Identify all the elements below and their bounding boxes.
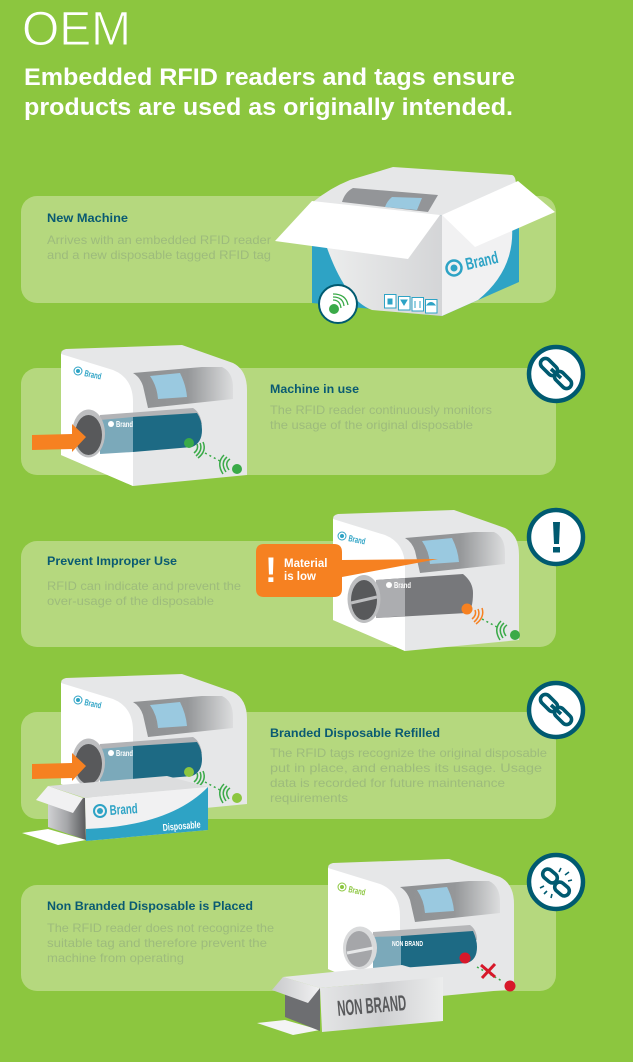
text: prevent improper use [47,579,241,608]
cylinder [72,737,202,786]
text: branded disposable refilled: data is recorded for future maintenance [270,776,505,790]
callout: material is low [256,544,438,597]
heading: machine in use: Machine in use [270,382,359,396]
handling symbols [384,294,437,313]
text: branded disposable refilled: put in place, and enables its usage. Usage [270,761,542,775]
failed rfid link [460,952,516,992]
text: machine in use: The RFID reader continuously monitors [270,403,492,417]
brand logo: Brand [84,697,102,710]
icon: rfid tag badge [319,285,357,323]
subtitle: Embedded RFID readers and tags ensure [24,64,515,91]
brand logo [338,883,366,897]
text: prevent improper use: RFID can indicate and prevent the [47,579,241,593]
panel: machine in use [21,368,556,475]
rfid signal [184,767,242,803]
panel: new machine [21,196,556,303]
cylinder [348,574,473,623]
brand logo [74,367,102,381]
cylinder: Brand [116,749,133,758]
arrow [32,424,86,452]
subtitle: products are used as originally intended. [24,94,513,121]
rfid signal [462,604,520,640]
brand logo: box: Brand [464,248,500,274]
brand logo: box [446,248,500,276]
brand logo: Brand [348,884,366,897]
illustration: machine with branded disposable [22,674,247,845]
icon: linked chain 2 [529,683,583,737]
text: non branded disposable [47,921,274,965]
title: OEM [22,3,131,56]
brand logo: Brand [348,533,366,546]
text: machine in use: the usage of the original disposable [270,418,473,432]
text: branded disposable refilled [270,746,547,805]
illustration: machine in open box [275,167,555,323]
heading: branded disposable refilled: Branded Disposable Refilled [270,726,440,740]
text: prevent improper use: over-usage of the disposable [47,594,214,608]
callout: material is low: is low [284,571,316,583]
cylinder: Brand [116,420,133,429]
text: branded disposable refilled: requirements [270,791,348,805]
illustration: machine in use [32,345,247,486]
brand logo [338,532,366,546]
illustration: machine with non brand disposable [257,859,516,1035]
cylinder [343,925,477,970]
callout: material is low: Material [284,558,327,570]
cylinder [72,408,202,458]
callout: material is low: ! [265,551,277,590]
disposable box: Disposable [162,820,201,834]
rfid signal [184,438,242,474]
text: branded disposable refilled: The RFID tags recognize the original disposable [270,746,547,760]
text: non branded disposable: The RFID reader does not recognize the [47,921,274,935]
cylinder: NON BRAND [392,941,423,948]
text: new machine: Arrives with an embedded RFID reader [47,233,271,247]
arrow [32,753,86,781]
disposable box: Brand [109,800,138,818]
panel: non branded disposable [21,885,556,991]
heading: prevent improper use: Prevent Improper Use [47,554,177,568]
non brand box [257,965,443,1035]
cylinder: Brand [394,581,411,590]
non brand box: NON BRAND [336,990,407,1021]
icon: linked chain 1 [529,347,583,401]
text: new machine: and a new disposable tagged RFID tag [47,248,271,262]
panel: branded disposable refilled [21,712,556,819]
heading: non branded disposable: Non Branded Disposable is Placed [47,899,253,913]
heading: new machine: New Machine [47,211,128,225]
subtitle [24,64,515,121]
disposable box [22,776,208,845]
text: non branded disposable: suitable tag and therefore prevent the [47,936,267,950]
icon: alert [529,510,583,564]
text: machine in use [270,403,492,432]
icon: broken chain [529,855,583,909]
brand logo [74,696,102,710]
text: non branded disposable: machine from operating [47,951,184,965]
text: new machine [47,233,271,262]
brand logo: Brand [84,368,102,381]
illustration: machine low material [256,510,520,651]
panel: prevent improper use [21,541,556,647]
